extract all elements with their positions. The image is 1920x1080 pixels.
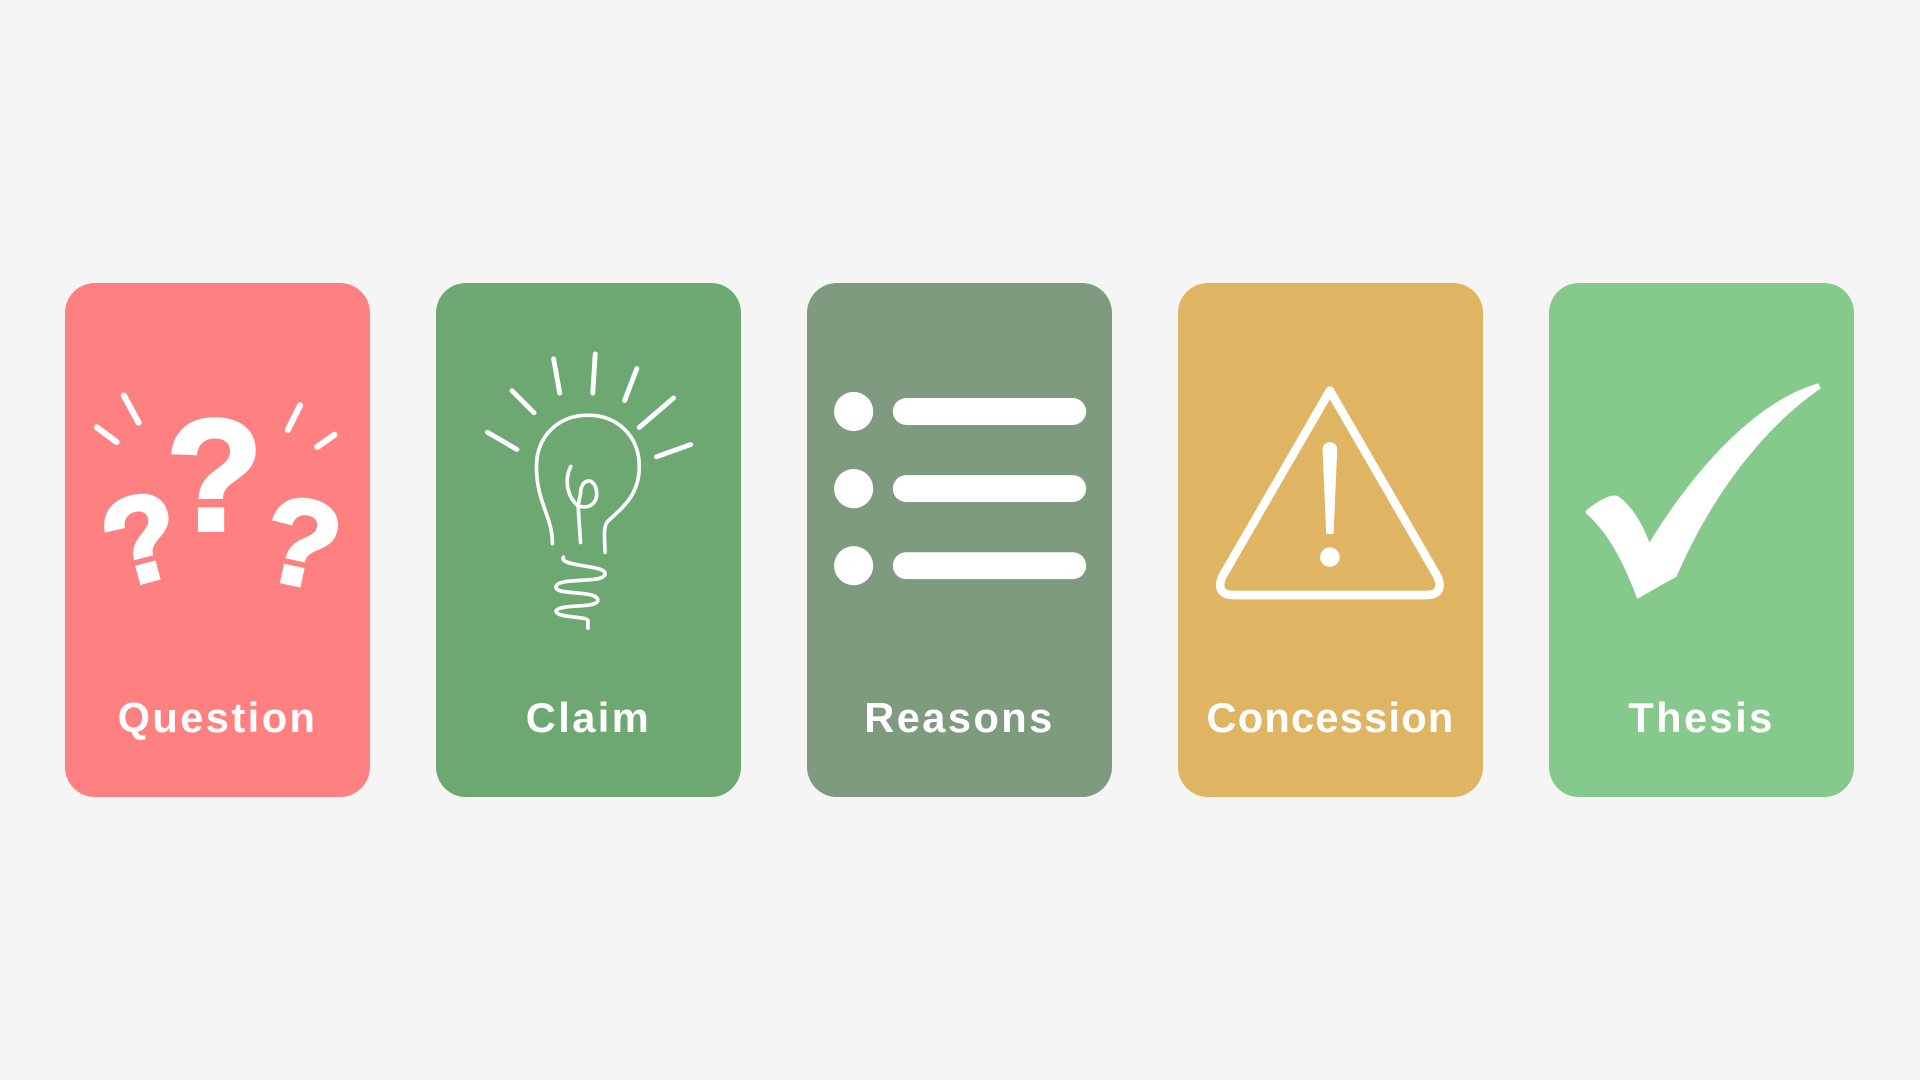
icon: question marks: ? <box>166 386 263 564</box>
panel: question <box>65 283 370 797</box>
panel: claim <box>436 283 741 797</box>
label: Thesis: Thesis <box>1628 694 1775 741</box>
icon: question marks <box>88 386 353 617</box>
panel: reasons <box>807 283 1112 797</box>
label: Claim: Claim <box>526 694 651 741</box>
label: Question: Question <box>118 694 317 741</box>
panel: concession <box>1178 283 1483 797</box>
label: Concession: Concession <box>1207 694 1455 741</box>
icon: list <box>834 392 1086 585</box>
icon: question marks: ? <box>88 463 195 615</box>
icon: light bulb <box>488 354 691 628</box>
label: Reasons: Reasons <box>864 694 1055 741</box>
icon: warning triangle <box>1220 391 1440 595</box>
icon: question marks: ? <box>251 468 353 617</box>
panel: thesis <box>1549 283 1854 797</box>
icon: check mark <box>1586 383 1821 599</box>
